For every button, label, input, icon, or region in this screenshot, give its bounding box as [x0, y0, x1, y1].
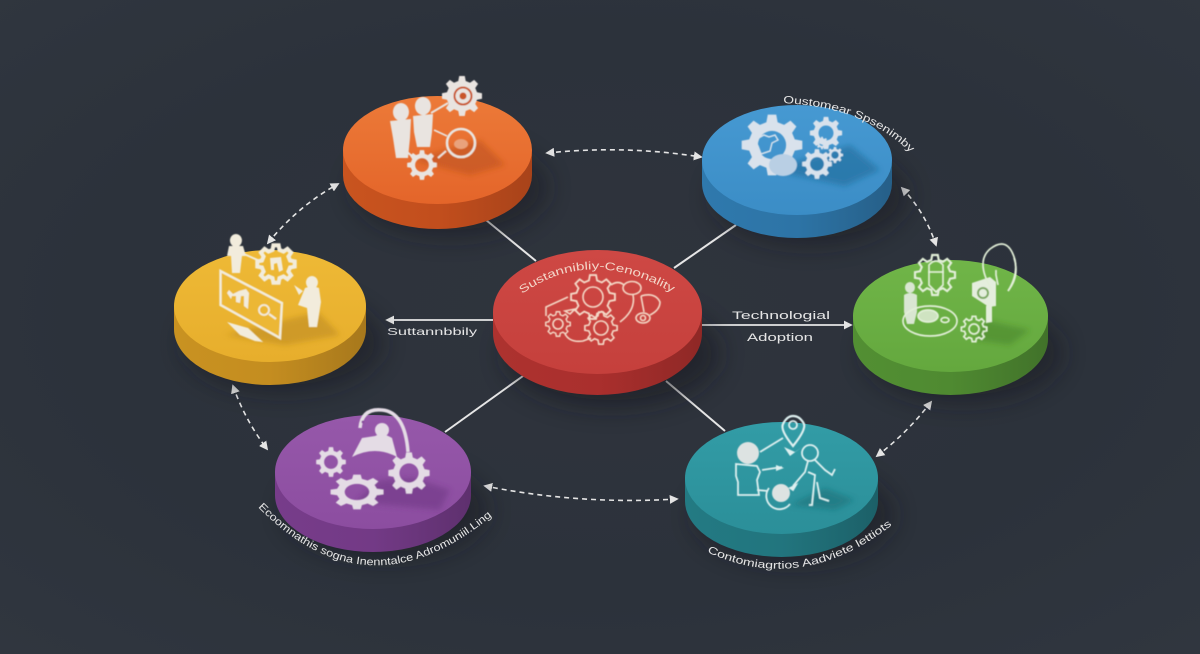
panel: teal disc — [685, 416, 894, 565]
panel: green disc — [853, 244, 1063, 403]
icon: people and gears — [390, 76, 505, 180]
label: customer advocates: Contomiagrtios Aadviete lettiots — [708, 522, 891, 570]
dashed arrow: blue to green — [902, 188, 936, 245]
arrow: red to right — [702, 324, 851, 326]
arrow: red to left — [387, 319, 493, 321]
label: Sustainability left: Suttannbbily — [387, 326, 478, 338]
connector: purple to red — [445, 376, 523, 432]
dashed arrow: purple to yellow — [233, 386, 267, 449]
dashed arrow: green to teal — [877, 402, 931, 456]
panel: blue disc — [702, 105, 908, 246]
panel: purple disc — [275, 410, 488, 560]
label: customer speciality: Oustomear Spsenimby — [784, 96, 914, 152]
icon: people, gear and monitor — [220, 234, 340, 345]
panel: yellow disc — [174, 234, 383, 393]
label: Technological Adoption: Technologial — [732, 310, 830, 322]
label: sustainability centrality: Sustannibliy-Cenonality — [520, 261, 675, 292]
panel: orange disc — [343, 76, 548, 238]
icon: person, devices and gears — [903, 244, 1030, 345]
icon: gears and head — [316, 410, 450, 510]
connector: orange to red — [486, 220, 536, 261]
connector: blue to red — [674, 225, 736, 268]
dashed arrow: teal to purple — [485, 486, 677, 500]
dashed arrow: orange to blue — [547, 150, 701, 157]
icon: gears — [742, 115, 880, 186]
label: Technological Adoption — [732, 310, 830, 344]
icon: gear network — [546, 275, 660, 344]
label: economic adoption: Ecoomnathis sogna Inenntalce Adromuniil.Ling — [258, 502, 492, 566]
icon: people and location pin — [736, 416, 855, 510]
label: Technological Adoption: Adoption — [747, 332, 813, 344]
dashed arrow: yellow to orange — [268, 184, 338, 243]
connector: teal to red — [666, 381, 725, 431]
panel: central red disc — [493, 250, 726, 410]
